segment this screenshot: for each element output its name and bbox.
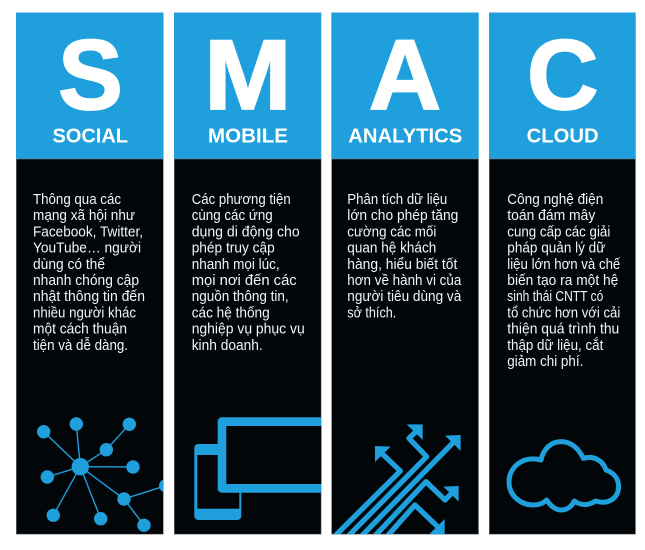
text block: cloud: cung cấp các giải [507, 224, 610, 240]
text block: analytics: quan hệ khách [347, 241, 436, 257]
text block: social: mạng xã hội như [33, 208, 135, 224]
big letter A: A [369, 20, 441, 131]
analytics header background [331, 12, 479, 159]
text block: cloud: biến tạo ra một hệ [507, 273, 618, 289]
text block: mobile: kinh doanh. [192, 338, 263, 354]
text block: cloud: thiện quá trình thu [507, 322, 619, 338]
text block: cloud: tổ chức hơn với cải [507, 305, 620, 321]
icon: network [37, 417, 172, 532]
text block: analytics: người tiêu dùng và [347, 289, 462, 305]
text block: cloud: pháp quản lý dữ [507, 241, 605, 257]
cloud header background [489, 12, 636, 159]
text block: analytics: hơn về hành vi của [347, 273, 462, 289]
mobile header background [174, 12, 321, 159]
text block: mobile [192, 192, 305, 354]
text block: analytics: Phân tích dữ liệu [347, 192, 447, 208]
text block: mobile: nghiệp vụ phục vụ [192, 322, 305, 338]
icon: branching arrows [332, 424, 461, 539]
social body background [16, 159, 163, 534]
text block: social [33, 192, 145, 354]
big letter C: C [527, 19, 598, 130]
text block: analytics: lớn cho phép tăng [347, 208, 458, 224]
text block: cloud: toán đám mây [507, 208, 596, 224]
text block: mobile: Các phương tiện [192, 192, 291, 208]
text block: cloud: liệu lớn hơn và chế [507, 257, 621, 273]
heading: analytics: ANALYTICS [348, 126, 462, 148]
text block: social: tiện và dễ dàng. [33, 337, 128, 354]
text block: social: dùng có thể [33, 257, 105, 273]
text block: analytics: hàng, hiểu biết tốt [347, 257, 457, 273]
heading: social: SOCIAL [52, 126, 128, 148]
heading: cloud: CLOUD [527, 126, 599, 148]
analytics body background [332, 159, 478, 534]
text block: mobile: nguồn thông tin, [192, 289, 289, 305]
text block: cloud: sinh thái CNTT có [507, 289, 603, 305]
big letter M: M [204, 20, 292, 130]
social header background [16, 12, 164, 159]
text block: social: nhanh chóng cập [33, 273, 139, 289]
text block: mobile: nhanh mọi lúc, [192, 257, 280, 273]
text block: social: nhiều người khác [33, 305, 137, 321]
text block: social: nhật thông tin đến [33, 289, 145, 305]
icon: phone and tablet [194, 417, 322, 520]
panel: social [16, 12, 172, 534]
text block: mobile: phép truy cập [192, 241, 275, 257]
cloud body background [489, 159, 636, 534]
text block: analytics [347, 192, 462, 321]
text block: mobile: cùng các ứng [192, 208, 273, 224]
text block: analytics: sở thích. [347, 305, 396, 321]
text block: social: YouTube… người [33, 241, 141, 257]
text block: social: Thông qua các [33, 192, 122, 208]
icon: cloud [509, 442, 619, 510]
text block: cloud [507, 192, 621, 370]
text block: cloud: giảm chi phí. [507, 354, 583, 370]
text block: mobile: các hệ thống [192, 305, 270, 321]
text block: social: Facebook, Twitter, [33, 224, 143, 240]
text block: social: một cách thuận [33, 322, 127, 338]
text block: cloud: thập dữ liệu, cắt [507, 337, 603, 354]
text block: cloud: Công nghệ điện [507, 192, 603, 208]
panel: mobile [174, 12, 338, 534]
panel: cloud [489, 12, 636, 534]
panel: analytics [331, 12, 479, 539]
text block: mobile: dụng di động cho [192, 224, 300, 240]
text block: analytics: cường các mối [347, 224, 436, 240]
heading: mobile: MOBILE [208, 126, 288, 148]
mobile body background [174, 159, 321, 534]
big letter S: S [58, 19, 123, 130]
text block: mobile: mọi nơi đến các [192, 273, 297, 289]
